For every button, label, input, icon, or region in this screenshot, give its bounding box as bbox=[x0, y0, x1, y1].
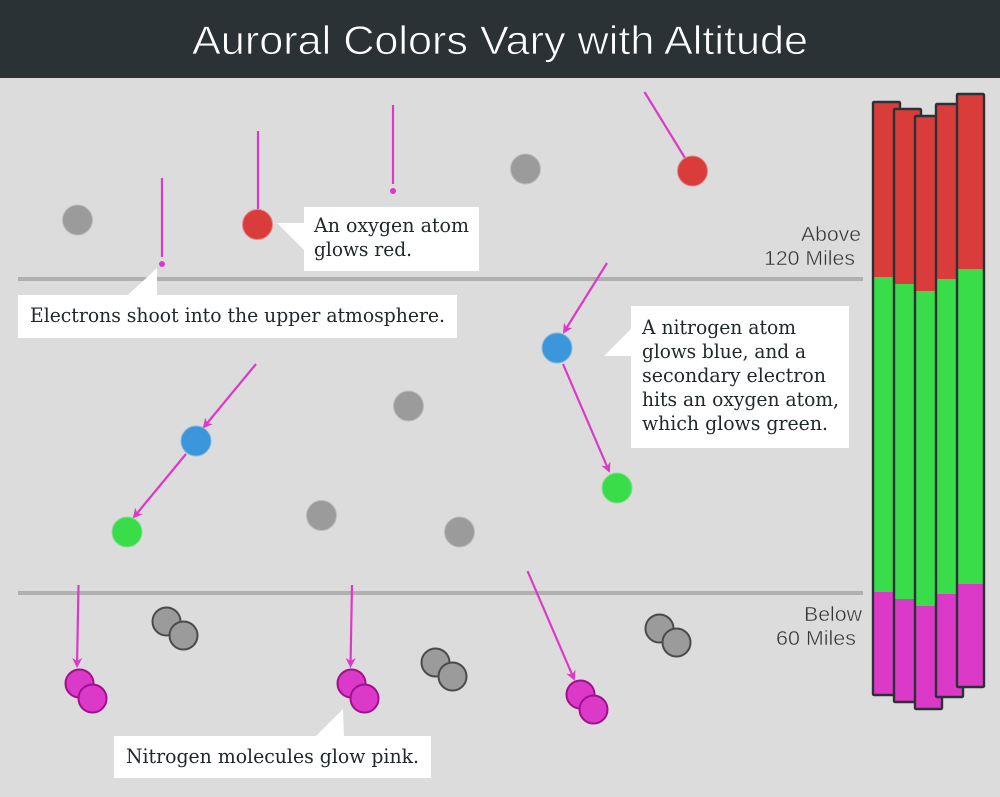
arrows to nitrogen molecules bbox=[77, 571, 574, 679]
blue atoms bbox=[181, 333, 572, 456]
pink nitrogen molecules bbox=[66, 670, 608, 724]
callout: electrons bbox=[18, 268, 457, 338]
label: below 60 miles: 60 Miles bbox=[776, 628, 856, 650]
bar 4 bbox=[936, 104, 963, 697]
callout: nitrogen pink bbox=[114, 709, 431, 778]
callout: nitrogen blue: hits an oxygen atom, bbox=[642, 388, 839, 411]
callout: nitrogen pink: Nitrogen molecules glow pink. bbox=[126, 745, 419, 768]
bar 3 bbox=[915, 116, 942, 709]
altitude line: 60 miles bbox=[18, 591, 863, 595]
callout: nitrogen blue: A nitrogen atom bbox=[641, 316, 796, 339]
callout: oxygen red: glows red. bbox=[314, 238, 412, 261]
label: below 60 miles: Below bbox=[804, 604, 863, 626]
green atoms bbox=[112, 473, 632, 547]
gray oxygen atoms bbox=[62, 154, 540, 547]
label: above 120 miles: Above bbox=[801, 224, 861, 246]
arrows to blue atoms bbox=[204, 263, 607, 427]
callout: nitrogen blue: glows blue, and a bbox=[642, 340, 806, 363]
electron: upper left with dot bbox=[159, 178, 165, 267]
altitude line: 120 miles bbox=[18, 277, 863, 281]
callout: electrons: Electrons shoot into the upper atmosphere. bbox=[30, 304, 445, 327]
bar 5 bbox=[957, 94, 984, 687]
callout: oxygen red: An oxygen atom bbox=[313, 214, 469, 237]
red atoms bbox=[242, 156, 708, 240]
bar 2 bbox=[894, 109, 921, 702]
callout: oxygen red bbox=[277, 207, 479, 271]
secondary electron arrows to green atoms bbox=[134, 364, 609, 517]
aurora color bars bbox=[873, 94, 984, 709]
callout: nitrogen blue bbox=[604, 306, 849, 448]
callout: nitrogen blue: secondary electron bbox=[642, 364, 826, 387]
gray nitrogen molecules bbox=[152, 608, 690, 690]
electron: upper middle with dot bbox=[390, 105, 396, 194]
label: above 120 miles bbox=[764, 224, 861, 270]
title banner bbox=[0, 0, 1000, 78]
bar 1 bbox=[873, 102, 900, 695]
callout: nitrogen blue: which glows green. bbox=[642, 412, 828, 435]
label: below 60 miles bbox=[776, 604, 863, 650]
electron hitting red atom bbox=[257, 131, 259, 210]
title banner: Auroral Colors Vary with Altitude bbox=[192, 19, 808, 63]
label: above 120 miles: 120 Miles bbox=[764, 248, 855, 270]
electron hitting red atom upper right bbox=[644, 92, 685, 158]
